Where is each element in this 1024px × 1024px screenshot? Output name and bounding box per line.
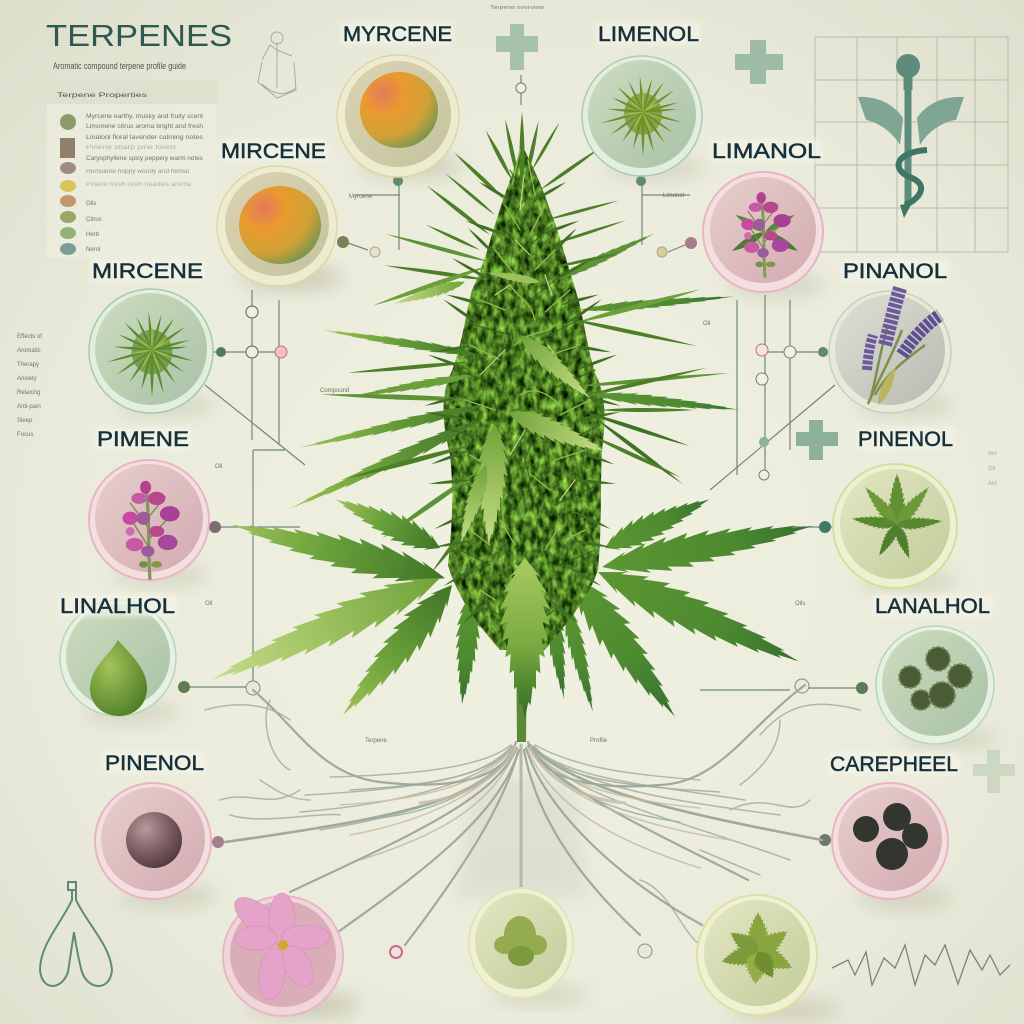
side annotation text right: Aid [988, 481, 997, 487]
circle: limenol bush [582, 56, 705, 180]
center fan leaf [500, 558, 550, 718]
circle: pinenol leaf [833, 464, 958, 594]
bud highlight leaves [392, 268, 610, 546]
legend text rows: Linalool floral lavender calming notes [86, 135, 203, 141]
legend text rows: Nerol [86, 247, 100, 253]
label: myrcene: MYRCENE [343, 23, 452, 46]
circle: bottom right bud [697, 895, 840, 1020]
bud spikes left [287, 112, 524, 624]
grid panel with medical symbol [815, 37, 1008, 252]
circle: linalhol olive [60, 600, 180, 724]
icon: cross right [796, 420, 838, 460]
side annotation text right [988, 451, 997, 487]
side annotation text left: Aromatic [17, 348, 41, 354]
legend text rows: Pinene fresh resin needles aroma [86, 182, 192, 188]
icon: green bush [600, 76, 682, 156]
label: carepheel: CAREPHEEL [830, 753, 958, 776]
connector lines [178, 75, 868, 958]
label: pinenol right: PINENOL [858, 428, 953, 451]
icon: green bud [494, 916, 547, 966]
icon: caduceus [858, 54, 964, 218]
legend text rows: Caryophyllene spicy peppery warm notes [86, 156, 203, 162]
circle: myrcene mango [337, 55, 462, 179]
circle: lanalhol buds [876, 626, 996, 750]
icon: pink flower [228, 890, 330, 1002]
icon: pink flowers [730, 192, 800, 278]
connector tiny labels: Oil [215, 464, 222, 470]
icon: cross upper right [735, 40, 783, 84]
title: TERPENES [46, 18, 232, 53]
circle: pinanol lavender [829, 288, 955, 417]
short spikes left [424, 181, 511, 624]
subtitle text: Aromatic compound terpene profile guide [53, 61, 186, 71]
legend panel: Terpene Properties [57, 92, 148, 99]
legend text rows: Herb [86, 232, 100, 238]
legend swatches [60, 114, 76, 255]
label: pinanol: PINANOL [843, 260, 947, 283]
circle: carepheel berries [832, 783, 953, 910]
legend text rows: Pinene sharp pine forest [86, 145, 176, 151]
label: mircene left: MIRCENE [92, 260, 203, 283]
icon: pink flower spray [122, 481, 180, 580]
connector tiny labels: Oil [703, 321, 710, 327]
connector tiny labels: Compound [320, 388, 349, 394]
circle: pimene flowers [89, 460, 210, 587]
icon: green bush [106, 311, 194, 397]
chart: ecg waveform [832, 945, 1010, 985]
side annotation text left: Focus [17, 432, 33, 438]
connector tiny labels: Oils [795, 601, 805, 607]
large fan leaves [204, 487, 816, 728]
side annotation text left: Sleep [17, 418, 33, 424]
legend text rows [86, 114, 203, 253]
connector tiny labels: Myrcene [349, 194, 373, 200]
side annotation text left [17, 334, 42, 438]
connector tiny labels: Limonol [663, 193, 684, 199]
icon: cross faint [973, 750, 1015, 793]
roots [205, 685, 860, 945]
icon: stethoscope [40, 882, 112, 986]
side annotation text right: Bio [988, 451, 997, 457]
flower bud body [444, 145, 604, 650]
connector nodes [178, 83, 868, 958]
label: lanalhol: LANALHOL [875, 595, 990, 618]
short spikes right [534, 181, 621, 624]
circle: mircene mango [217, 166, 344, 292]
connector tiny labels: Oil [205, 601, 212, 607]
icon: lavender [867, 288, 940, 407]
circle: pinenol plum [95, 783, 216, 908]
connector tiny labels: Terpene [365, 738, 387, 744]
connector tiny labels: Profile [590, 738, 608, 744]
label: pimene: PIMENE [97, 428, 189, 451]
icon: dark berries [853, 803, 928, 870]
legend text rows: Humulene hoppy woody and herbal [86, 169, 189, 175]
circle: bottom center bud [469, 888, 588, 1004]
icon: mango [239, 186, 321, 264]
legend text rows: Myrcene earthy, musky and fruity scent [86, 114, 203, 120]
icon: top cross [496, 24, 538, 70]
icon: mango [360, 72, 438, 148]
label: mircene upper: MIRCENE [221, 140, 326, 163]
label: limanol: LIMANOL [712, 140, 821, 163]
label: limenol: LIMENOL [598, 23, 699, 46]
side annotation text left: Anxiety [17, 376, 37, 382]
icon: green bud leaves [719, 912, 797, 985]
icon: olive drop [90, 640, 147, 716]
icon: green leaf [851, 473, 943, 561]
icon: anatomy sketch [258, 32, 296, 98]
icon: plum sphere [126, 812, 182, 868]
small header text: Terpene overview [490, 5, 544, 11]
cannabis plant [204, 112, 816, 742]
side annotation text left: Therapy [17, 362, 39, 368]
legend text rows: Limonene citrus aroma bright and fresh [86, 124, 203, 130]
connector tiny labels [205, 193, 805, 744]
icon: buds cluster [899, 647, 972, 710]
bud strands [450, 150, 600, 630]
side annotation text left: Anti-pain [17, 404, 41, 410]
side annotation text left: Relaxing [17, 390, 40, 396]
circle: limanol flowers [703, 172, 825, 298]
bud spikes right [524, 121, 740, 624]
legend text rows: Oils [86, 201, 96, 207]
label: linalhol: LINALHOL [60, 595, 175, 618]
legend text rows: Citrus [86, 217, 102, 223]
circle: mircene green bush [89, 289, 215, 417]
circle: pink flower [223, 890, 360, 1017]
side annotation text left: Effects of [17, 334, 42, 340]
stem [516, 640, 527, 742]
label: pinenol left: PINENOL [105, 752, 204, 775]
legend panel [47, 80, 217, 258]
side annotation text right: Oil [988, 466, 995, 472]
